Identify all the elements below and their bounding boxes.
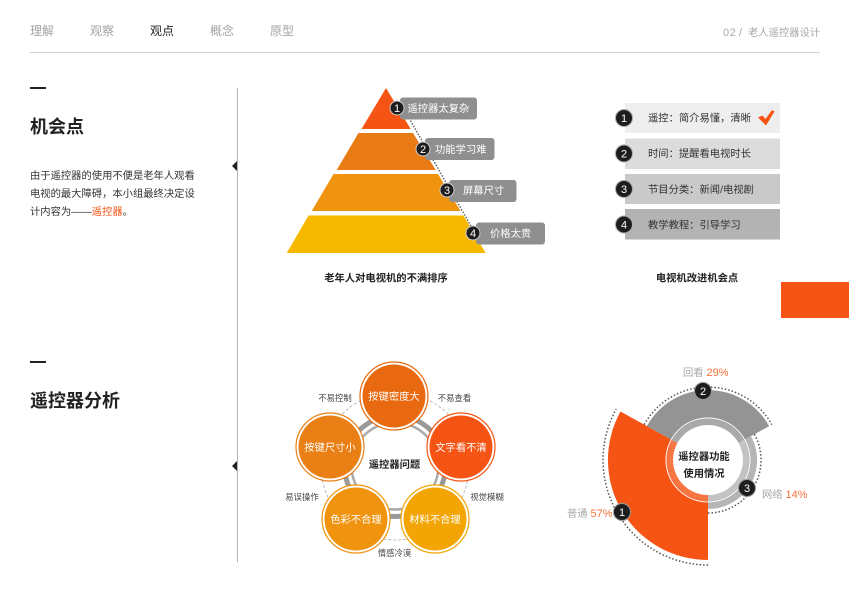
heading: opportunity: 机会点: [30, 117, 84, 137]
pyramid label 1: 遥控器太复杂: [408, 102, 469, 115]
node: small text: [427, 413, 495, 481]
marker 2: 2: [700, 386, 706, 398]
pyramid label 4: 价格太贵: [490, 227, 531, 240]
chart centre label: [678, 450, 730, 480]
pyramid label 4: [466, 222, 545, 244]
pyramid caption: 老年人对电视机的不满排序: [324, 272, 448, 284]
node: small keys: 按键尺寸小: [304, 441, 356, 454]
sector: network 14%: [708, 436, 757, 509]
marker 1: 1: [619, 507, 625, 519]
opportunity description: 由于遥控器的使用不便是老年人观看: [30, 169, 195, 182]
marker 3: 3: [744, 483, 750, 495]
list item 1: 遥控：简介易懂，清晰: [648, 112, 751, 124]
list item 4: 教学教程：引导学习: [648, 218, 741, 232]
node: colour: 色彩不合理: [330, 513, 382, 526]
problem cycle diagram: [285, 362, 504, 558]
list item 3: 节目分类：新闻/电视剧: [648, 183, 754, 196]
node: colour: [322, 485, 390, 553]
pyramid label 1: 1: [394, 103, 400, 115]
header navigation: 概念: [210, 23, 234, 38]
centre label: 遥控器问题: [369, 458, 421, 471]
page label: 老人遥控器设计: [748, 26, 820, 39]
marker 1: [614, 504, 630, 520]
marker triangle bottom: [232, 461, 237, 471]
value label: network: 网络 14%: [762, 488, 808, 501]
pyramid label 1: [390, 98, 477, 120]
pyramid label 4: 4: [470, 228, 476, 240]
sector: normal 57%: [608, 412, 708, 560]
header navigation: 原型: [270, 24, 294, 38]
annotations: [285, 393, 504, 558]
marker 3: [738, 480, 756, 496]
pyramid label 2: 2: [420, 144, 426, 156]
node: material: 材料不合理: [409, 513, 461, 526]
opportunity description: [30, 169, 195, 218]
list item 1: [616, 103, 780, 133]
node: dense keys: [360, 362, 428, 430]
page label: /: [739, 27, 743, 39]
section heading: remote analysis: 遥控器分析: [30, 390, 120, 411]
orange side tab: [781, 282, 849, 318]
chart centre label: 遥控器功能: [678, 450, 730, 463]
pyramid label 3: [440, 180, 516, 202]
annotations: 易误操作: [285, 492, 319, 502]
marker triangle top: [232, 161, 237, 171]
pyramid label 2: 功能学习难: [435, 143, 486, 156]
list item 2: 2: [621, 148, 627, 160]
header navigation: [30, 23, 294, 38]
annotations: 不易控制: [318, 393, 352, 403]
annotations: 不易查看: [438, 393, 471, 403]
node: material: [401, 485, 469, 553]
value label: replay: 回看 29%: [683, 366, 729, 379]
usage radial chart: [567, 366, 808, 565]
sector: replay 29%: [647, 390, 769, 460]
list item 3: [616, 174, 780, 204]
marker 2: [694, 382, 712, 400]
improvement list: [616, 103, 780, 240]
header navigation: 观察: [90, 24, 114, 38]
opportunity description: 电视的最大障碍，本小组最终决定设: [30, 187, 195, 200]
list caption: 电视机改进机会点: [656, 272, 738, 284]
annotations: 视觉模糊: [470, 492, 504, 502]
node: small keys: [296, 413, 364, 481]
pyramid label 3: 屏幕尺寸: [463, 184, 504, 197]
list item 2: [616, 138, 780, 169]
node: small text: 文字看不清: [435, 441, 487, 454]
section heading: remote analysis: [30, 361, 120, 411]
header navigation: 观点: [150, 24, 174, 38]
list item 3: 3: [621, 184, 627, 196]
list item 4: 4: [621, 220, 627, 232]
page label: 02: [723, 27, 736, 39]
pyramid chart: [287, 88, 545, 253]
value label: normal: 普通 57%: [567, 507, 613, 520]
list item 4: [616, 209, 780, 240]
pyramid label 2: [416, 138, 494, 160]
header navigation: 理解: [30, 24, 54, 38]
node: dense keys: 按键密度大: [368, 390, 420, 403]
section: opportunity: [30, 87, 195, 218]
chart centre label: 使用情况: [683, 467, 725, 480]
annotations: 情感冷漠: [378, 548, 412, 558]
pyramid label 3: 3: [444, 185, 450, 197]
list item 1: 1: [621, 113, 627, 125]
opportunity description: 计内容为——遥控器。: [30, 205, 133, 218]
icon: check mark: [758, 110, 774, 126]
page label: [723, 26, 820, 39]
list item 2: 时间：提醒看电视时长: [648, 147, 751, 160]
